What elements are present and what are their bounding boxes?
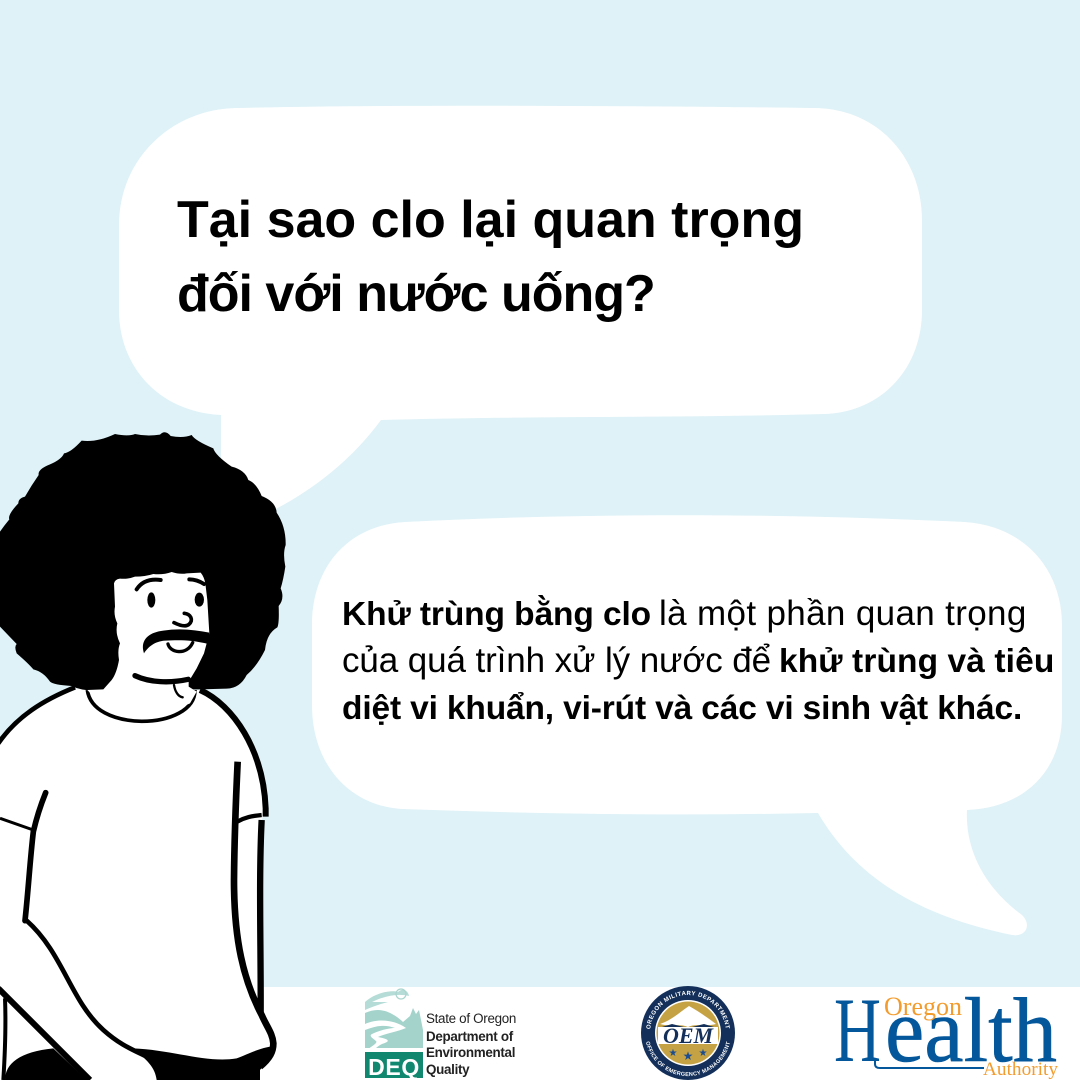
title: đối với nước uống?	[177, 265, 655, 323]
answer text: là một phần quan trọng	[659, 594, 1027, 633]
answer text	[342, 594, 1054, 727]
title: Tại sao clo lại quan trọng	[177, 191, 804, 249]
DEQ wordmark: State of Oregon	[426, 1011, 516, 1026]
answer text: Khử trùng bằng clo	[342, 596, 651, 633]
DEQ wordmark: Quality	[426, 1062, 470, 1077]
answer text: khử trùng và tiêu	[779, 643, 1054, 680]
logo: Oregon Military Department OEM seal: ★	[683, 1049, 693, 1063]
logo: Oregon Health Authority: Authority	[983, 1059, 1059, 1080]
DEQ wordmark: Department of	[426, 1029, 514, 1044]
logo: Oregon Health Authority: H	[834, 979, 881, 1080]
logo: Oregon Military Department OEM seal	[641, 986, 735, 1080]
head: afro hair and face	[0, 432, 286, 713]
title	[177, 191, 804, 323]
logo: Oregon DEQ	[365, 989, 516, 1080]
logo: Oregon Military Department OEM seal: OEM	[663, 1023, 714, 1048]
footer band	[0, 987, 1080, 1080]
DEQ wordmark: Environmental	[426, 1045, 515, 1060]
DEQ wordmark	[426, 1011, 516, 1077]
logo: Oregon DEQ: DEQ	[368, 1054, 420, 1080]
DEQ badge	[365, 1052, 423, 1078]
speech bubble: answer	[312, 515, 1062, 935]
logo: Oregon Military Department OEM seal: OREGON MILITARY DEPARTMENT	[646, 990, 730, 1029]
logo: Oregon Health Authority: ealth	[885, 979, 1057, 1080]
character: man with afro	[0, 432, 286, 1080]
DEQ landscape mark	[365, 990, 409, 1010]
body: t-shirt and arms	[0, 687, 275, 1080]
answer text: diệt vi khuẩn, vi-rút và các vi sinh vật khác.	[342, 690, 1022, 727]
logo: Oregon Health Authority: Oregon	[884, 992, 962, 1021]
logo: Oregon Military Department OEM seal: ★	[699, 1048, 708, 1059]
answer text: của quá trình xử lý nước để	[342, 641, 771, 680]
logo: Oregon Military Department OEM seal: OFFICE OF EMERGENCY MANAGEMENT	[646, 1041, 730, 1076]
logo: Oregon Military Department OEM seal: ★	[669, 1048, 678, 1059]
speech bubble: question	[119, 106, 922, 530]
